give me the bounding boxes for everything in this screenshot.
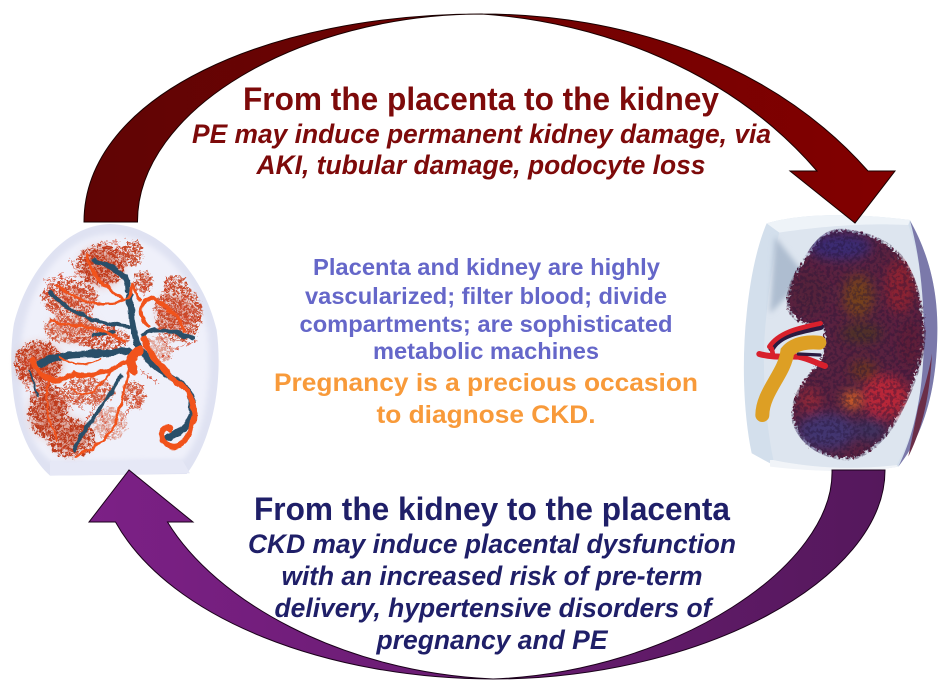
kidney speckle [783,227,930,463]
text: placenta to kidney description: PE may induce permanent kidney damage, via [192,119,771,149]
text: shared characteristics: vascularized; filter blood; divide [305,283,667,309]
kidney ureter [762,342,819,415]
kidney image [744,215,937,471]
heading: from the kidney to the placenta: From the kidney to the placenta [254,491,730,527]
arrow: placenta to kidney [84,14,895,223]
placenta capillary clusters [14,240,202,458]
kidney case [744,215,937,471]
placenta fine branches [20,242,200,457]
text: kidney to placenta description: with an increased risk of pre-term [282,561,702,591]
text: placenta to kidney description: AKI, tubular damage, podocyte loss [256,150,706,180]
text: kidney to placenta description: CKD may induce placental dysfunction [248,529,736,559]
placenta case [11,224,219,476]
text: shared characteristics: metabolic machines [373,338,599,364]
placenta image [11,224,219,476]
text: pregnancy callout: to diagnose CKD. [376,401,596,429]
placenta dark vessels [30,260,193,450]
text: pregnancy callout [274,369,698,429]
placenta capillary haze [20,249,194,452]
text: kidney to placenta description: delivery, hypertensive disorders of [274,593,714,623]
text: placenta to kidney description [192,119,771,180]
kidney renal vessels [759,323,825,366]
arrow: kidney to placenta [89,470,885,679]
placenta orange vessels [32,255,194,457]
text: shared characteristics: Placenta and kidney are highly [313,254,660,280]
text: kidney to placenta description [248,529,736,655]
text: shared characteristics: compartments; are sophisticated [300,311,672,337]
kidney colour zones [792,233,922,450]
text: kidney to placenta description: pregnancy and PE [376,625,608,655]
text: pregnancy callout: Pregnancy is a precious occasion [274,369,698,397]
text: shared characteristics [300,254,672,364]
kidney body [788,231,924,458]
heading: from the placenta to the kidney: From the placenta to the kidney [243,81,719,117]
